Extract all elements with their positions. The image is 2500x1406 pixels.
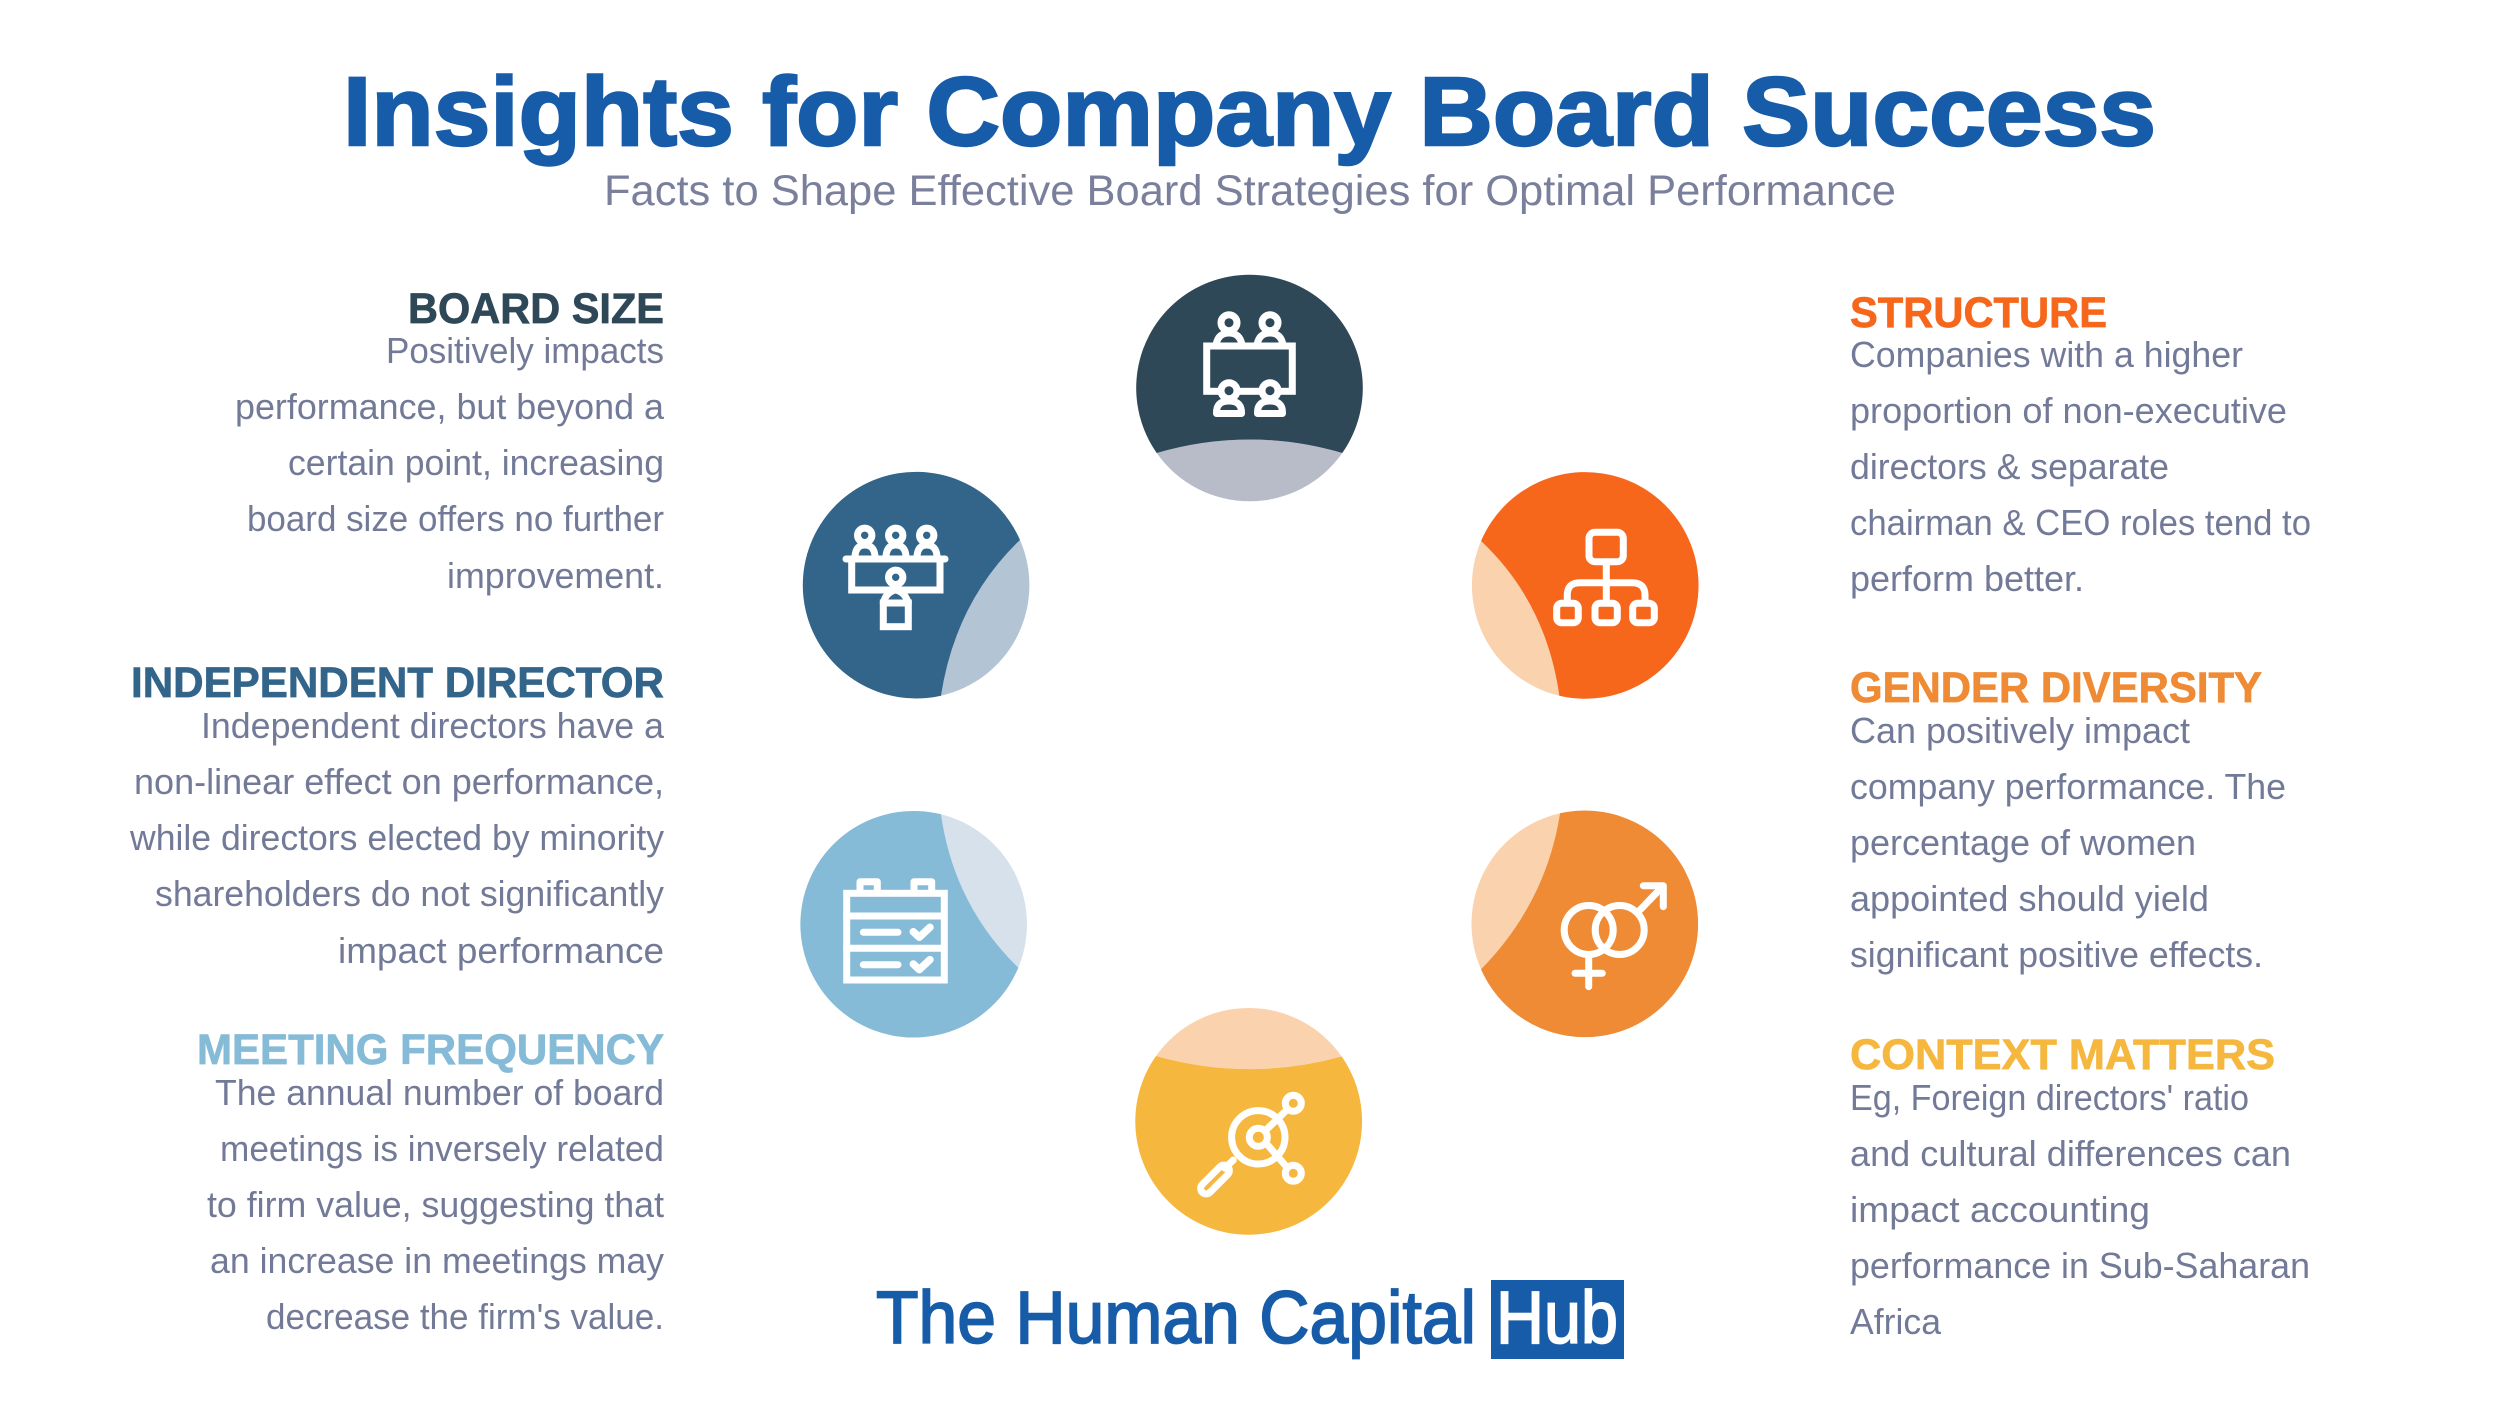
panel: structure: [1850, 289, 2311, 599]
text: gender diversity description: [1850, 710, 2286, 975]
logo: The Human Capital Hub: The Human Capital: [876, 1276, 1476, 1359]
text: context matters description: performance in Sub-Saharan: [1850, 1245, 2310, 1286]
text: board size description: performance, but beyond a: [235, 386, 665, 427]
text: independent director description: non-linear effect on performance,: [134, 761, 664, 802]
text: independent director description: [129, 705, 665, 971]
text: meeting frequency description: to firm value, suggesting that: [207, 1184, 664, 1225]
panel: gender diversity: [1850, 664, 2286, 975]
text: meeting frequency description: [207, 1072, 664, 1337]
icon: structure circle: [1472, 472, 1699, 699]
heading: structure: STRUCTURE: [1850, 289, 2107, 337]
panel: meeting frequency: [197, 1026, 664, 1337]
text: board size description: [235, 330, 665, 596]
subtitle: Facts to Shape Effective Board Strategies for Optimal Performance: [604, 167, 1896, 215]
text: independent director description: impact performance: [338, 930, 664, 971]
heading: meeting frequency: MEETING FREQUENCY: [197, 1026, 664, 1074]
text: structure description: perform better.: [1850, 558, 2084, 599]
icon: independent director circle: [803, 472, 1029, 698]
text: context matters description: [1850, 1077, 2310, 1342]
text: gender diversity description: Can positively impact: [1850, 710, 2190, 751]
text: meeting frequency description: decrease the firm's value.: [266, 1296, 664, 1337]
text: context matters description: Eg, Foreign directors' ratio: [1850, 1077, 2249, 1118]
text: context matters description: impact accounting: [1850, 1189, 2150, 1230]
icon: gender diversity circle: [1471, 811, 1698, 1037]
icon: context matters circle: [1135, 1008, 1362, 1235]
icon: meeting frequency circle: [800, 811, 1027, 1038]
text: gender diversity description: percentage of women: [1850, 822, 2196, 863]
text: meeting frequency description: meetings is inversely related: [220, 1128, 664, 1169]
text: board size description: Positively impacts: [386, 330, 664, 371]
heading: board size: BOARD SIZE: [408, 285, 664, 333]
text: meeting frequency description: an increase in meetings may: [210, 1240, 664, 1281]
logo: The Human Capital Hub: Hub: [1496, 1276, 1618, 1359]
heading: context matters: CONTEXT MATTERS: [1850, 1031, 2275, 1079]
text: gender diversity description: appointed should yield: [1850, 878, 2209, 919]
text: gender diversity description: significant positive effects.: [1850, 934, 2263, 975]
text: context matters description: Africa: [1850, 1301, 1942, 1342]
panel: board size: [235, 285, 665, 596]
text: context matters description: and cultural differences can: [1850, 1133, 2291, 1174]
text: independent director description: shareholders do not significantly: [155, 873, 664, 914]
panel: context matters: [1850, 1031, 2310, 1342]
icon: board size circle: [1136, 275, 1363, 501]
text: structure description: [1850, 334, 2311, 599]
heading: gender diversity: GENDER DIVERSITY: [1850, 664, 2262, 712]
text: structure description: proportion of non-executive: [1850, 390, 2287, 431]
text: meeting frequency description: The annual number of board: [215, 1072, 664, 1113]
panel: independent director: [129, 659, 665, 971]
text: structure description: chairman & CEO roles tend to: [1850, 502, 2311, 543]
text: gender diversity description: company performance. The: [1850, 766, 2286, 807]
text: board size description: board size offers no further: [247, 498, 664, 539]
text: independent director description: Independent directors have a: [201, 705, 665, 746]
text: structure description: directors & separate: [1850, 446, 2169, 487]
text: board size description: improvement.: [447, 555, 664, 596]
heading: independent director: INDEPENDENT DIRECTOR: [131, 659, 664, 707]
text: structure description: Companies with a higher: [1850, 334, 2243, 375]
text: board size description: certain point, increasing: [288, 442, 664, 483]
text: independent director description: while directors elected by minority: [129, 817, 664, 858]
title: Insights for Company Board Success: [343, 57, 2156, 166]
